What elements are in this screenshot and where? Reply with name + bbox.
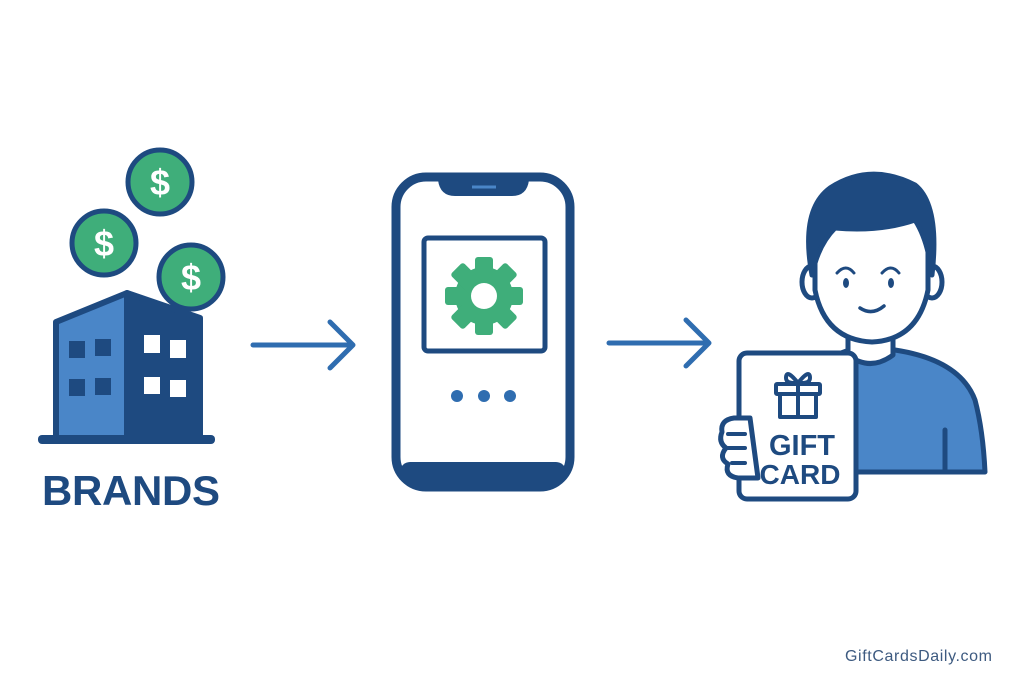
- icon: person with gift card: [721, 174, 985, 499]
- icon: gear: [445, 257, 523, 335]
- footer: site name: GiftCardsDaily.com: [845, 648, 992, 665]
- label: brands: BRANDS: [42, 467, 220, 514]
- arrow 1: [253, 322, 353, 368]
- icon: coins: [72, 150, 223, 309]
- arrow 2: [609, 320, 709, 366]
- icon: coins: $: [181, 257, 201, 298]
- icon: coins: $: [150, 162, 170, 203]
- icon: coins: $: [94, 223, 114, 264]
- icon: phone: [396, 177, 570, 487]
- gift card text: [760, 430, 840, 490]
- gift card text: CARD: [760, 459, 840, 490]
- icon: building: [38, 293, 215, 444]
- gift card text: GIFT: [769, 430, 835, 462]
